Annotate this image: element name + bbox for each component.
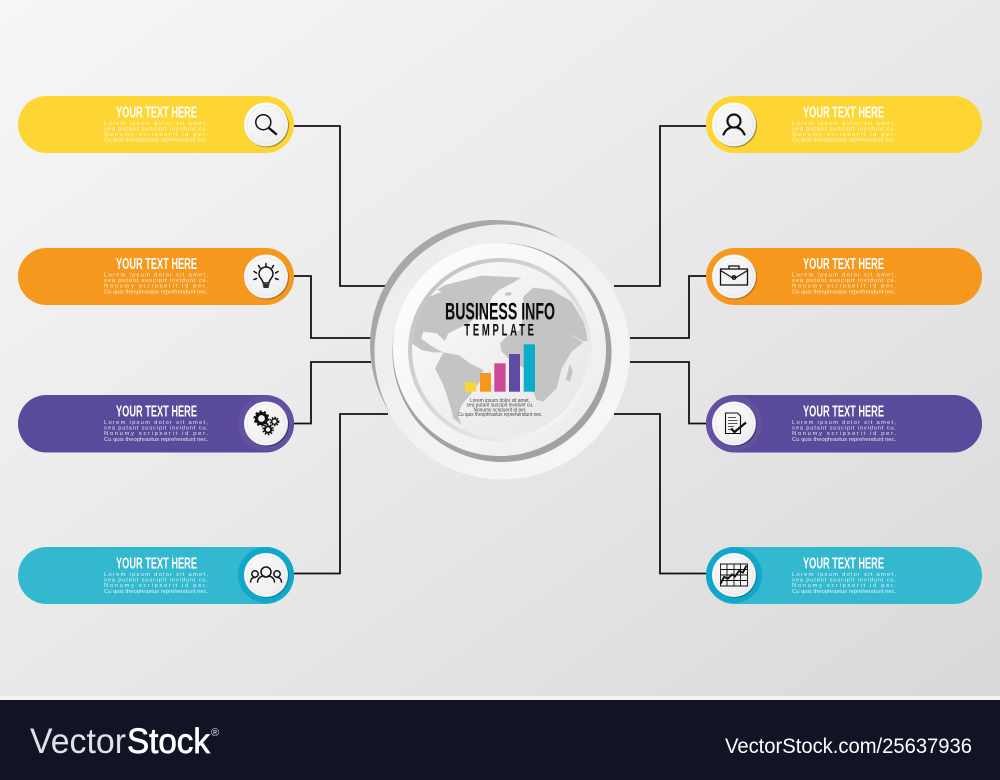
panel: right purple [706,395,982,452]
footer bar [0,700,1000,780]
panel: right orange: YOUR TEXT HERE [803,256,884,273]
world map [407,276,592,425]
panel: left orange: sea putant suscipit invidunt cu. [104,278,208,284]
panel: left yellow: Nonumy scripserit id per. [104,132,208,138]
icon: briefcase [720,266,748,285]
footer logo [30,722,210,761]
inner white disc [393,243,606,456]
panel: right yellow [706,96,982,153]
inner grey crescent [392,243,612,462]
panel: right purple: sea putant suscipit invidunt cu. [792,426,896,432]
panel: left yellow: sea putant suscipit invidunt cu. [104,126,208,132]
panel: right teal: sea putant suscipit invidunt cu. [792,578,896,584]
panel: right yellow: Cu quis theophrastus reprehendunt nec. [792,138,896,144]
center body text [458,398,542,418]
panel: right yellow: YOUR TEXT HERE [803,104,884,121]
panel: left purple: Lorem ipsum dolor sit amet, [104,420,208,426]
icon: light bulb [254,264,278,287]
panel: left purple: Nonumy scripserit id per. [104,431,208,437]
center body text: sea putant suscipit invidunt cu. [466,403,534,409]
panel: left orange: Nonumy scripserit id per. [104,284,208,290]
connector lines [294,126,706,574]
center body text: Cu quis theophrastus reprehendunt nec. [458,412,542,418]
registered mark: ® [211,727,219,739]
footer logo: Vector [30,722,126,761]
panel: left yellow: YOUR TEXT HERE [116,104,197,121]
center body text: Nonumy scripserit id per. [474,407,526,413]
panel: right teal: Nonumy scripserit id per. [792,583,896,589]
panel: left teal: YOUR TEXT HERE [116,556,197,572]
panel: right orange: Nonumy scripserit id per. [792,284,896,290]
outer light ring [374,224,630,480]
icon: person [724,114,744,134]
panel: right teal [706,547,982,604]
panel: left yellow [18,96,294,153]
panel: right yellow: sea putant suscipit invidunt cu. [792,126,896,132]
panel: left teal: sea putant suscipit invidunt cu. [104,578,208,584]
panel: right orange [706,248,982,305]
panel: left purple: sea putant suscipit invidunt cu. [104,426,208,432]
icon: gears [254,412,279,434]
icon: people group [250,567,282,582]
icon: document with check [726,413,746,434]
panel: left orange: Cu quis theophrastus reprehendunt nec. [104,289,208,295]
panel: right purple: Lorem ipsum dolor sit amet, [792,420,896,426]
globe ring [408,258,592,442]
panel: right orange: sea putant suscipit invidunt cu. [792,278,896,284]
panel: right teal: YOUR TEXT HERE [803,556,884,572]
panel: left purple [18,395,294,452]
center title: BUSINESS INFO [445,298,555,326]
panel: right purple: Cu quis theophrastus reprehendunt nec. [792,437,896,443]
panel: left yellow: Lorem ipsum dolor sit amet, [104,121,208,127]
panel: left yellow: Cu quis theophrastus reprehendunt nec. [104,138,208,144]
panel: right orange: Lorem ipsum dolor sit amet, [792,273,896,279]
panel: right orange: Cu quis theophrastus reprehendunt nec. [792,289,896,295]
central circle emblem [370,220,630,480]
panel: left orange [18,248,294,305]
panel: left orange: YOUR TEXT HERE [116,256,197,273]
icon: line chart on grid [720,564,748,586]
footer logo: Stock [127,722,210,761]
panel: right teal: Lorem ipsum dolor sit amet, [792,572,896,578]
center subtitle: TEMPLATE [464,321,537,340]
panel: right yellow: Nonumy scripserit id per. [792,132,896,138]
panel: right yellow: Lorem ipsum dolor sit amet, [792,121,896,127]
panel: left teal: Nonumy scripserit id per. [104,583,208,589]
panel: left orange: Lorem ipsum dolor sit amet, [104,273,208,279]
center body text: Lorem ipsum dolor sit amet, [470,398,530,404]
panel: right purple: Nonumy scripserit id per. [792,431,896,437]
panel: right teal: Cu quis theophrastus reprehendunt nec. [792,589,896,595]
panel: left purple: YOUR TEXT HERE [116,404,197,420]
icon: magnifier [256,115,276,134]
mini bar chart [465,344,535,392]
panel: right purple: YOUR TEXT HERE [803,404,884,420]
panel: left purple: Cu quis theophrastus reprehendunt nec. [104,437,208,443]
globe disc [412,262,588,438]
outer grey crescent [370,220,620,470]
panel: left teal: Lorem ipsum dolor sit amet, [104,572,208,578]
panel: left teal: Cu quis theophrastus reprehendunt nec. [104,589,208,595]
footer id text: VectorStock.com/25637936 [725,735,972,758]
panel: left teal [18,547,294,604]
